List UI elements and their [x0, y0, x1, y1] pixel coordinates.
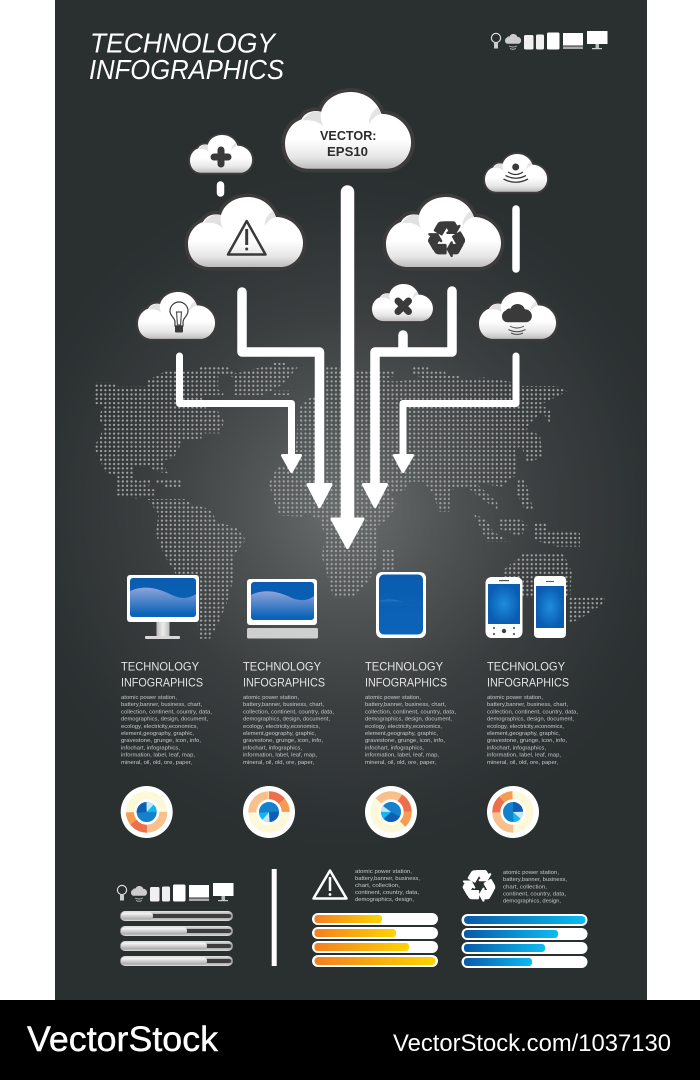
- slider 2: [120, 926, 233, 936]
- column body: gravestone, grunge, icon, info,: [365, 738, 445, 744]
- column body: collection, continent, country, data,: [121, 709, 212, 715]
- column body: demographics, design, document,: [243, 717, 330, 723]
- column 2 text: [243, 660, 334, 766]
- cloud: vector eps10: [285, 92, 411, 169]
- recycle text block: atomic power station,: [503, 870, 559, 876]
- column body: element,geography, graphic,: [487, 731, 560, 737]
- column body: atomic power station,: [243, 695, 299, 701]
- icon: laptop: [247, 579, 318, 638]
- column body: ecology, electricity,economics,: [243, 724, 320, 730]
- column body: battery,banner, business, chart,: [365, 702, 446, 708]
- title: [89, 28, 284, 85]
- icon: monitor: [127, 575, 199, 639]
- column heading: INFOGRAPHICS: [121, 676, 203, 690]
- cloud label: VECTOR:: [320, 128, 376, 143]
- panel: dark background: [55, 0, 647, 1000]
- cloud: recycle: [386, 197, 501, 268]
- column body: [121, 695, 212, 766]
- title: TECHNOLOGY: [90, 28, 277, 58]
- cloud: warning: [188, 197, 303, 267]
- blue bar 3: [462, 942, 588, 954]
- cloud: recycle: ♻: [425, 212, 468, 268]
- donut chart 2: [243, 786, 295, 838]
- column body: gravestone, grunge, icon, info,: [121, 738, 201, 744]
- column body: information, label, leaf, map,: [365, 753, 439, 759]
- column body: demographics, design, document,: [121, 717, 208, 723]
- column heading: TECHNOLOGY: [121, 660, 199, 674]
- arrow: cloud wifi to map: [394, 356, 516, 472]
- column body: infochart, infographics,: [365, 745, 424, 751]
- warning text block: atomic power station,: [355, 869, 412, 875]
- warning text block: [355, 869, 420, 903]
- arrow: warning cloud to map: [242, 292, 331, 506]
- phone two: [534, 576, 566, 638]
- column heading: INFOGRAPHICS: [365, 676, 447, 690]
- slider 3: [120, 941, 233, 951]
- icon: warning triangle: [314, 870, 346, 898]
- arrows: [180, 185, 516, 548]
- icon: smartphones: [486, 576, 566, 638]
- column body: element,geography, graphic,: [121, 731, 194, 737]
- vertical divider: [272, 869, 277, 966]
- donut chart 1: [121, 786, 173, 838]
- column body: information, label, leaf, map,: [243, 753, 317, 759]
- footer url: VectorStock.com/1037130: [393, 1030, 671, 1057]
- column body: collection, continent, country, data,: [487, 709, 578, 715]
- cloud: light bulb: [138, 292, 215, 339]
- arrow: bulb cloud to map: [180, 356, 300, 472]
- blue bar 2: [462, 928, 588, 940]
- donut chart 3: [365, 786, 417, 838]
- warning text block: chart, collection,: [355, 883, 400, 889]
- column body: mineral, oil, old, ore, paper,: [243, 760, 314, 766]
- column body: ecology, electricity,economics,: [365, 724, 442, 730]
- column 1 text: [121, 660, 212, 766]
- cloud: plus: [190, 135, 252, 173]
- blue bar 1: [462, 914, 588, 926]
- arrow: recycle and x clouds to map: [364, 291, 452, 506]
- column body: collection, continent, country, data,: [365, 709, 456, 715]
- column body: [487, 695, 578, 766]
- column body: element,geography, graphic,: [365, 731, 438, 737]
- column body: battery,banner, business, chart,: [243, 702, 324, 708]
- column heading: TECHNOLOGY: [487, 660, 565, 674]
- connector: plus to warning cloud: [217, 185, 224, 193]
- icon: tablet: [376, 572, 426, 638]
- column body: element,geography, graphic,: [243, 731, 316, 737]
- cloud label: [320, 128, 376, 159]
- warning text block: demographics, design,: [355, 897, 414, 903]
- slider 4: [120, 956, 233, 966]
- column body: mineral, oil, old, ore, paper,: [121, 760, 192, 766]
- orange bar 3: [312, 941, 438, 953]
- recycle text block: battery,banner, business,: [503, 877, 567, 883]
- column body: battery,banner, business, chart,: [121, 702, 202, 708]
- column body: ecology, electricity,economics,: [121, 724, 198, 730]
- cloud: cloud signal: [479, 292, 556, 339]
- column body: collection, continent, country, data,: [243, 709, 334, 715]
- icon: recycle white: ♻: [460, 862, 498, 910]
- dotted world map: [97, 364, 607, 638]
- column body: gravestone, grunge, icon, info,: [243, 738, 323, 744]
- arrow: central vector cloud to map: [332, 192, 363, 548]
- recycle text block: continent, country, data,: [503, 891, 566, 897]
- orange progress bars: [312, 913, 438, 967]
- title: INFOGRAPHICS: [89, 54, 284, 85]
- cloud label: EPS10: [327, 144, 368, 159]
- recycle text block: chart, collection,: [503, 884, 547, 890]
- column 3 text: [365, 660, 456, 766]
- warning text block: battery,banner, business,: [355, 876, 420, 882]
- blue progress bars: [462, 914, 588, 968]
- phone one: [486, 577, 522, 638]
- column body: infochart, infographics,: [121, 745, 180, 751]
- recycle text block: [503, 870, 567, 904]
- column heading: TECHNOLOGY: [365, 660, 443, 674]
- column 4 text: [487, 660, 578, 766]
- column body: gravestone, grunge, icon, info,: [487, 738, 567, 744]
- warning text block: continent, country, data,: [355, 890, 419, 896]
- column body: infochart, infographics,: [243, 745, 302, 751]
- column body: atomic power station,: [365, 695, 421, 701]
- icon row: bottom left devices: [117, 883, 234, 902]
- slider 1: [120, 911, 233, 921]
- column body: ecology, electricity,economics,: [487, 724, 564, 730]
- column body: infochart, infographics,: [487, 745, 546, 751]
- cloud: x mark: [372, 284, 433, 321]
- column body: battery,banner, business, chart,: [487, 702, 568, 708]
- column heading: TECHNOLOGY: [243, 660, 321, 674]
- footer brand: VectorStock: [27, 1020, 219, 1059]
- recycle text block: demographics, design,: [503, 898, 561, 904]
- orange bar 2: [312, 927, 438, 939]
- donut chart 4: [487, 786, 539, 838]
- orange bar 4: [312, 955, 438, 967]
- connector: wifi to cloud: [512, 209, 520, 269]
- column heading: INFOGRAPHICS: [487, 676, 569, 690]
- column body: [243, 695, 334, 766]
- column heading: [487, 660, 569, 690]
- orange bar 1: [312, 913, 438, 925]
- column body: mineral, oil, old, ore, paper,: [487, 760, 558, 766]
- column heading: [121, 660, 203, 690]
- column body: information, label, leaf, map,: [121, 753, 195, 759]
- slider bars: [120, 911, 233, 966]
- column body: atomic power station,: [487, 695, 543, 701]
- column heading: [243, 660, 325, 690]
- column body: mineral, oil, old, ore, paper,: [365, 760, 436, 766]
- cloud: signal: [485, 154, 547, 192]
- column body: information, label, leaf, map,: [487, 753, 561, 759]
- blue bar 4: [462, 956, 588, 968]
- column heading: [365, 660, 447, 690]
- column body: atomic power station,: [121, 695, 177, 701]
- icon row: top right devices: [491, 31, 608, 50]
- column body: demographics, design, document,: [487, 717, 574, 723]
- footer band: [0, 1000, 700, 1080]
- column body: demographics, design, document,: [365, 717, 452, 723]
- column body: [365, 695, 456, 766]
- column heading: INFOGRAPHICS: [243, 676, 325, 690]
